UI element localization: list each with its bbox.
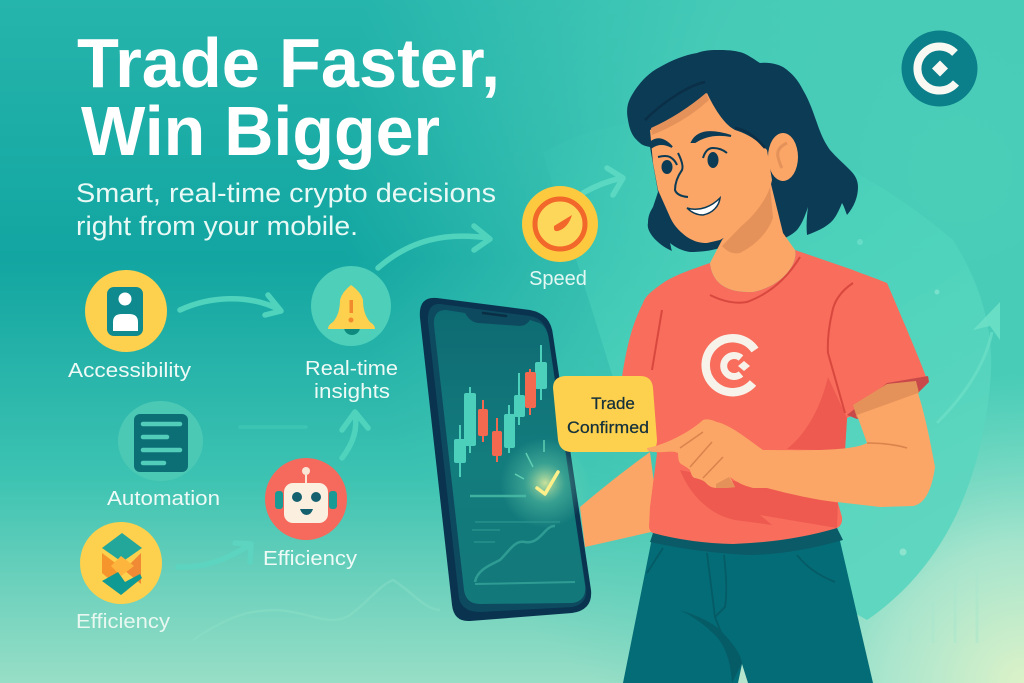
label: efficiency left: Efficiency (76, 611, 170, 633)
icon: robot (265, 458, 347, 540)
candlestick chart (455, 345, 546, 477)
label: speed: Speed (529, 268, 587, 290)
label: efficiency right: Efficiency (263, 548, 357, 570)
ear (768, 133, 798, 181)
icon: bell (311, 266, 391, 346)
mini line chart (472, 522, 575, 584)
sleeve hem (847, 376, 929, 419)
icon: efficiency cube (80, 522, 162, 604)
logo (902, 30, 978, 106)
right arm and pointing hand (647, 393, 935, 507)
hair strands (645, 82, 765, 148)
subtitle: Smart, real-time crypto decisions (76, 178, 496, 208)
decorative wave, bars and rising arrow (193, 239, 1000, 643)
trade confirmed card: Trade (591, 394, 635, 413)
neck (710, 180, 795, 292)
eyebrows (650, 139, 672, 147)
flow arrows (178, 168, 623, 567)
shirt (622, 250, 928, 544)
person (580, 50, 929, 683)
phone (420, 298, 591, 621)
label: real-time insights: insights (314, 381, 390, 403)
nose and smile (675, 153, 688, 197)
trade confirmed card (553, 376, 657, 452)
icon: automation (118, 401, 203, 481)
label: real-time insights: Real-time (305, 358, 398, 380)
icon: speed gauge (522, 186, 598, 262)
icon: accessibility (85, 270, 167, 352)
title (77, 24, 500, 170)
eyes (658, 148, 727, 174)
label: accessibility: Accessibility (68, 360, 191, 382)
face (650, 93, 772, 243)
title: Trade Faster, (77, 24, 500, 102)
confirmation check (470, 438, 590, 528)
subtitle (76, 178, 496, 241)
subtitle: right from your mobile. (76, 211, 358, 241)
pants (623, 528, 873, 683)
shirt logo (706, 338, 755, 392)
left arm (580, 452, 660, 547)
label: automation: Automation (107, 488, 220, 510)
trade confirmed card: Confirmed (567, 418, 649, 437)
label: real-time insights (305, 358, 398, 403)
hair (627, 50, 858, 252)
title: Win Bigger (81, 92, 440, 170)
